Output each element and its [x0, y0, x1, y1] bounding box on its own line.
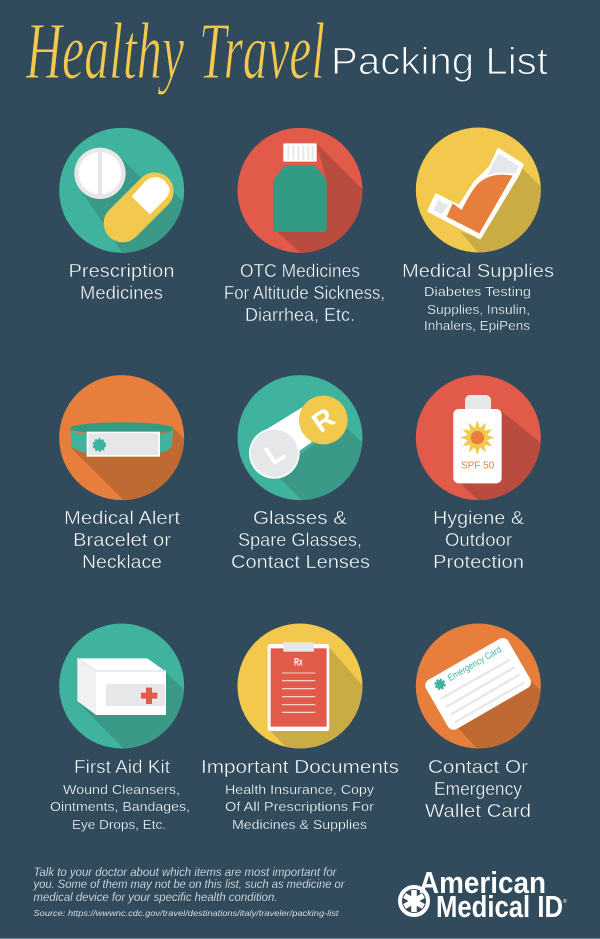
logo: American Medical ID: ®	[563, 898, 567, 905]
label: important documents: Of All Prescriptions For	[225, 800, 374, 814]
source line: Source: https://wwwnc.cdc.gov/travel/destinations/italy/traveler/packing-list	[34, 908, 339, 918]
label: glasses and contact lenses	[231, 508, 370, 572]
panel: OTC medicines	[224, 128, 385, 325]
panel: glasses and contact lenses	[232, 375, 370, 568]
label: hygiene and outdoor protection: Outdoor	[445, 530, 512, 550]
label: medical alert bracelet	[64, 508, 180, 572]
footer note: you. Some of them may not be on this list, such as medicine or	[33, 879, 346, 891]
label: OTC medicines: For Altitude Sickness,	[224, 283, 385, 303]
panel: medical alert bracelet	[59, 375, 184, 568]
label: medical supplies: Medical Supplies	[402, 261, 554, 281]
footer note: Talk to your doctor about which items are most important for	[34, 867, 338, 879]
panel: emergency wallet card	[416, 624, 541, 817]
label: medical alert bracelet: Medical Alert	[64, 508, 180, 528]
label: first aid kit: First Aid Kit	[74, 757, 170, 777]
label: prescription medicines: Medicines	[80, 283, 163, 303]
icon: sunscreen bottle	[416, 375, 541, 500]
icon: bracelet	[59, 375, 184, 500]
title: Packing List	[331, 41, 548, 83]
label: important documents: Medicines & Supplies	[232, 818, 367, 832]
icon: sunscreen bottle: SPF 50	[461, 461, 494, 472]
title	[25, 8, 548, 96]
label: first aid kit: Wound Cleansers,	[63, 783, 180, 797]
label: first aid kit: Ointments, Bandages,	[50, 800, 190, 814]
label: emergency wallet card: Wallet Card	[425, 801, 531, 821]
panel: prescription medicines	[59, 128, 184, 299]
icon: clipboard	[238, 624, 362, 748]
label: important documents: Health Insurance, Copy	[225, 783, 375, 797]
label: medical supplies	[402, 261, 554, 333]
panel: first aid kit	[50, 624, 189, 832]
label: hygiene and outdoor protection: Hygiene &	[433, 508, 524, 528]
label: glasses and contact lenses: Spare Glasses,	[238, 530, 362, 550]
logo: American Medical ID: Medical ID	[436, 889, 563, 924]
label: medical alert bracelet: Necklace	[82, 552, 162, 572]
label: emergency wallet card	[425, 757, 531, 821]
label: glasses and contact lenses: Contact Lenses	[231, 552, 370, 572]
icon: contact lens case: R	[306, 402, 341, 439]
icon: contact lens case: L	[259, 436, 290, 471]
panel: hygiene and outdoor protection	[416, 375, 541, 568]
icon: pills	[59, 128, 184, 253]
label: medical supplies: Diabetes Testing	[424, 285, 531, 299]
label: OTC medicines: OTC Medicines	[240, 261, 360, 281]
title: Travel	[199, 8, 325, 96]
label: hygiene and outdoor protection: Protection	[433, 552, 524, 572]
label: medical alert bracelet: Bracelet or	[73, 530, 171, 550]
icon: medicine bottle	[238, 128, 362, 253]
icon: first aid box	[59, 624, 184, 748]
footer note	[33, 867, 346, 904]
footer note: medical device for your specific health condition.	[34, 892, 278, 904]
label: hygiene and outdoor protection	[433, 508, 524, 572]
icon: emergency card: Emergency Card	[446, 644, 503, 683]
label: prescription medicines	[68, 261, 174, 303]
label: emergency wallet card: Contact Or	[428, 757, 528, 777]
panel: important documents	[201, 623, 399, 832]
label: medical supplies: Supplies, Insulin,	[427, 303, 530, 317]
label: OTC medicines: Diarrhea, Etc.	[245, 305, 355, 325]
label: medical supplies: Inhalers, EpiPens	[424, 319, 530, 333]
label: first aid kit	[50, 757, 190, 832]
icon: inhaler	[416, 128, 541, 252]
label: prescription medicines: Prescription	[68, 261, 174, 281]
icon: emergency card	[416, 624, 541, 748]
title: Healthy	[25, 8, 184, 96]
label: important documents	[201, 757, 399, 832]
label: OTC medicines	[224, 261, 385, 325]
label: emergency wallet card: Emergency	[434, 779, 522, 799]
logo: American Medical ID	[400, 865, 567, 924]
logo: American Medical ID: American	[419, 865, 546, 900]
label: first aid kit: Eye Drops, Etc.	[72, 818, 166, 832]
icon: clipboard: Rx	[294, 657, 303, 669]
panel: medical supplies	[402, 127, 567, 333]
icon: contact lens case	[238, 375, 362, 500]
label: important documents: Important Documents	[201, 757, 399, 777]
label: glasses and contact lenses: Glasses &	[253, 508, 347, 528]
